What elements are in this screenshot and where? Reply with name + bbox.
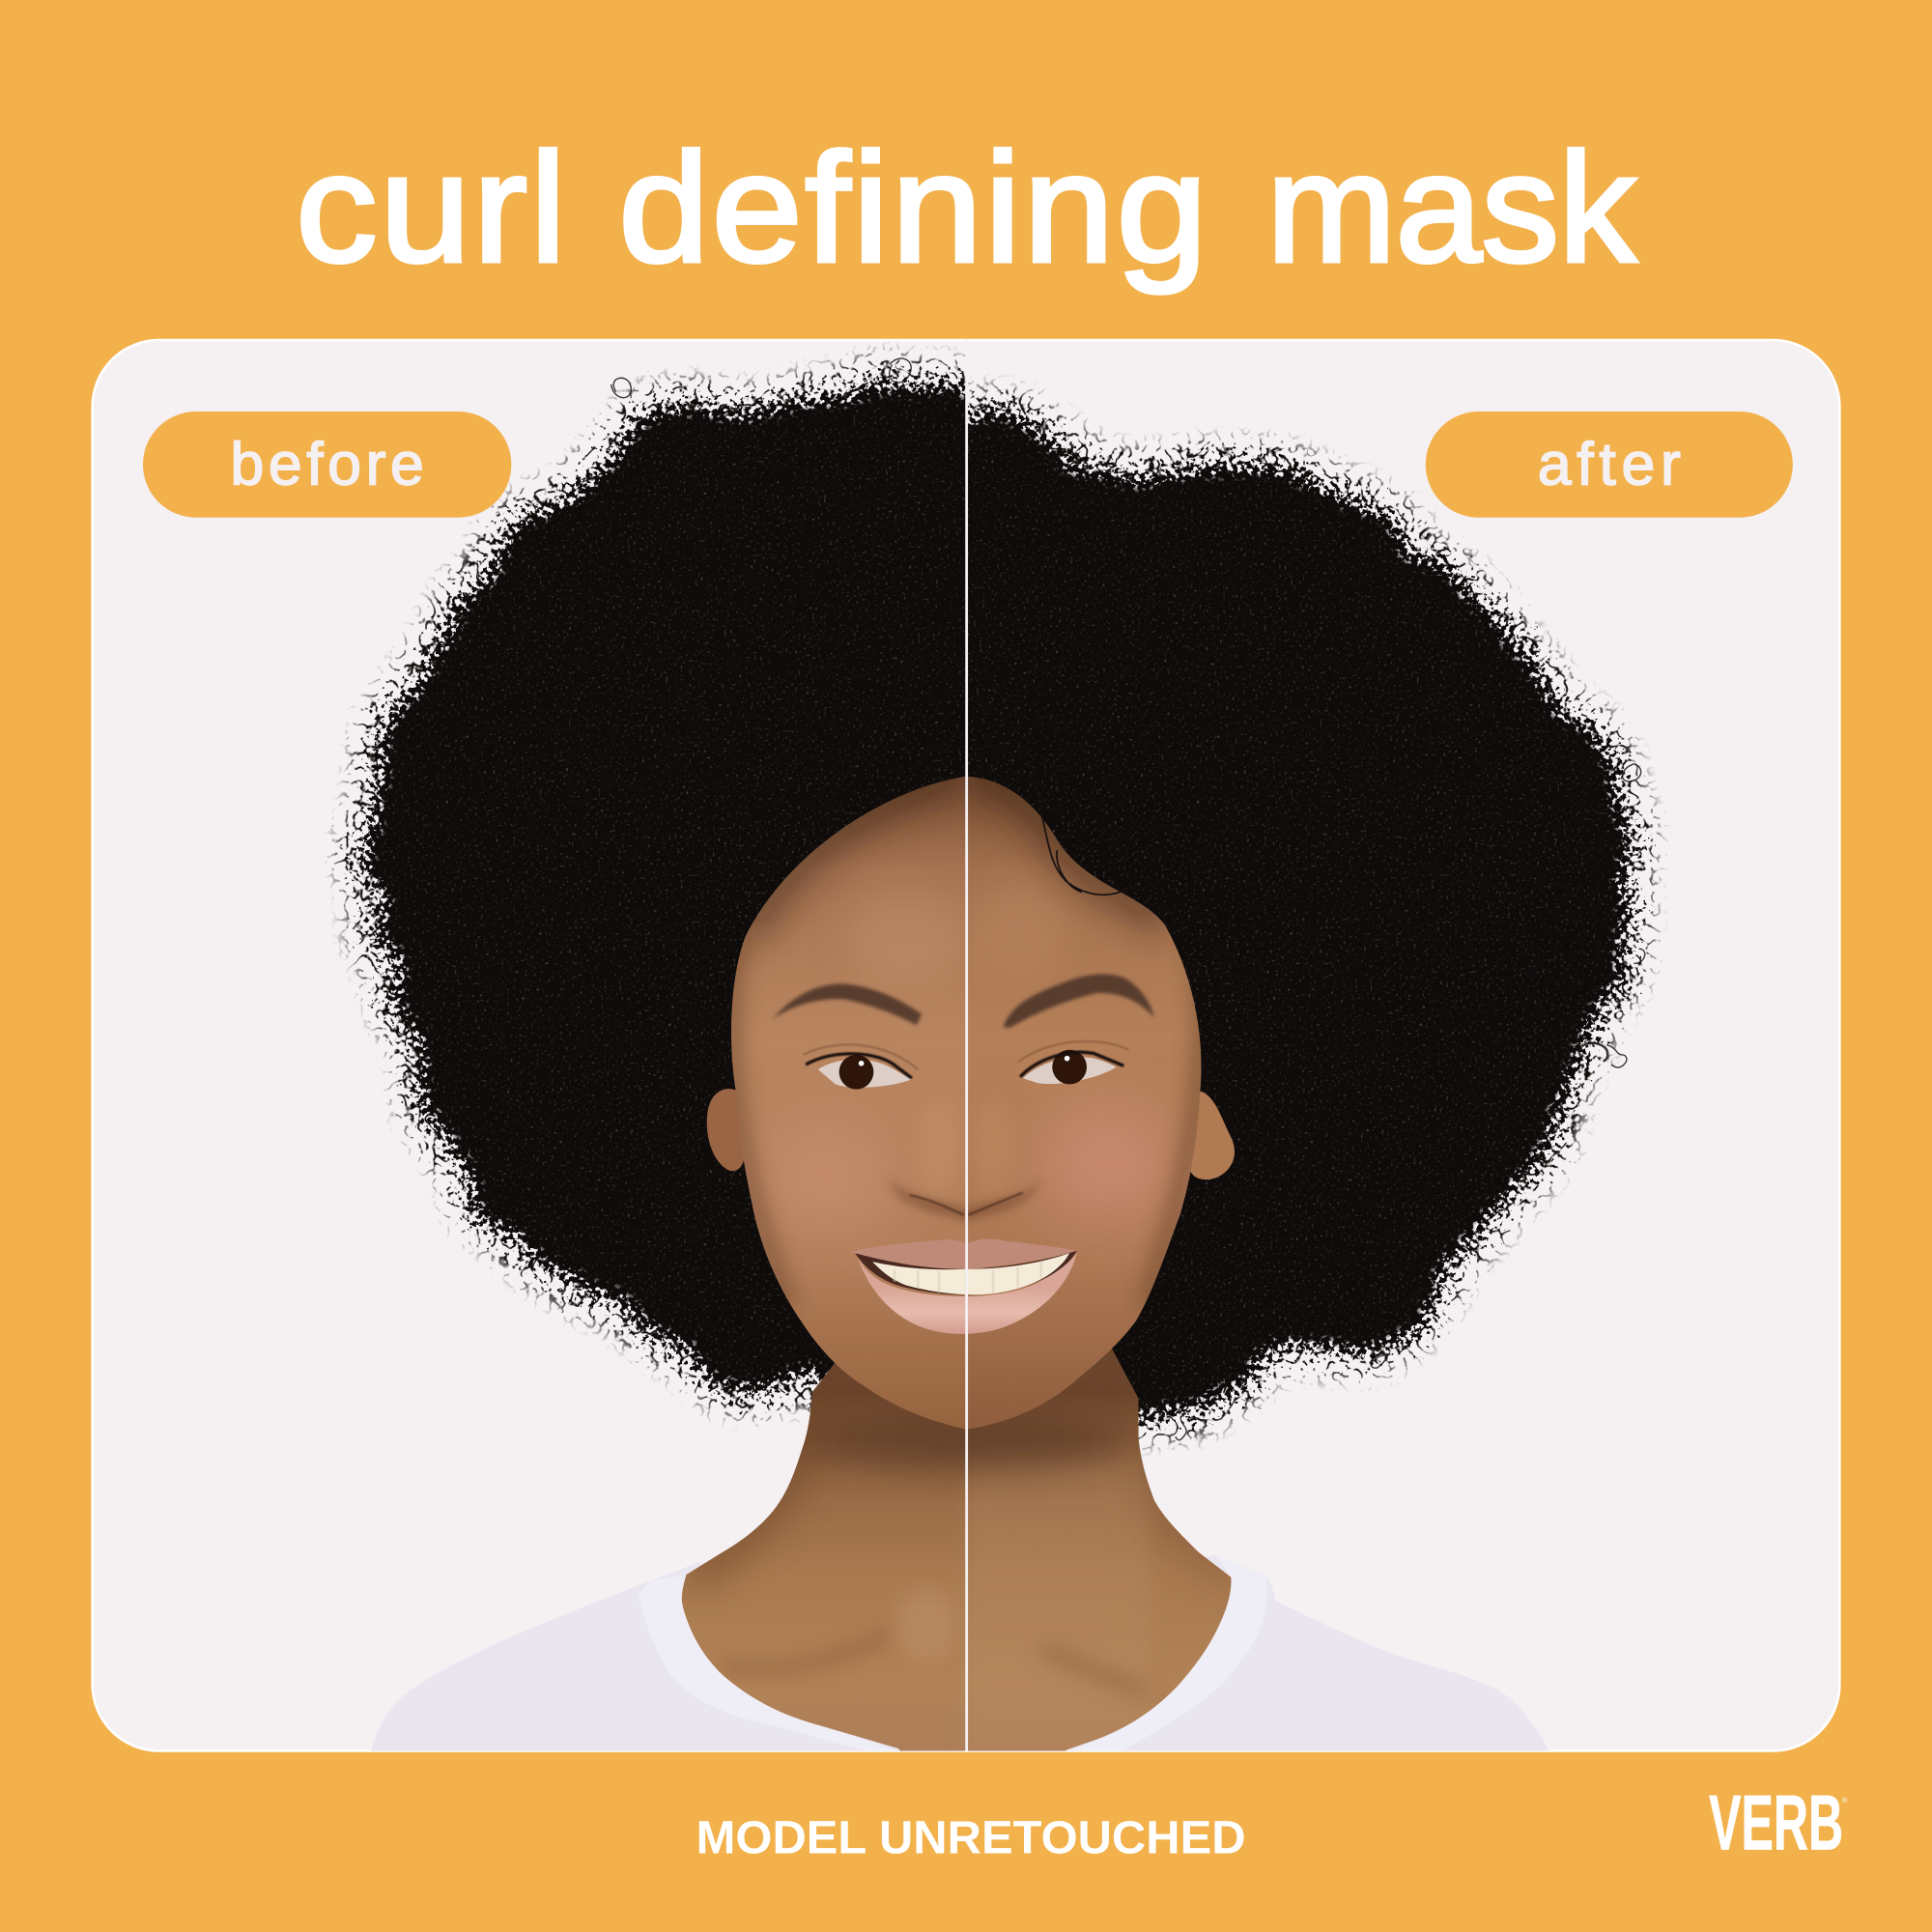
lash line: after: [1020, 1052, 1123, 1077]
collar: after: [1060, 1555, 1266, 1756]
hair frizz: before: [362, 374, 1010, 1441]
iris: after: [1052, 1050, 1087, 1084]
lid crease: after: [1018, 1041, 1128, 1062]
teeth: [872, 1253, 1069, 1294]
skin: before: [715, 764, 966, 1441]
collarbone: after: [1042, 1651, 1146, 1690]
collar: before: [639, 1575, 912, 1756]
eye: before: [804, 1044, 918, 1090]
hair: before side: [357, 369, 1010, 1441]
iris: before: [839, 1055, 873, 1090]
tooth gaps: [895, 1262, 1041, 1296]
title: curl: [296, 121, 566, 295]
skin: after: [966, 764, 1212, 1441]
footer caption: MODEL UNRETOUCHED: [696, 1811, 1246, 1863]
panel background: [93, 340, 1839, 1751]
hair frizz: after: [924, 410, 1635, 1441]
eyebrow: before: [773, 983, 922, 1025]
temple baby curls: [1041, 813, 1127, 895]
pill: after: [1426, 412, 1793, 518]
pill shape: after: [1426, 412, 1793, 518]
cheek blush: after: [1037, 1105, 1180, 1224]
pill label: after: after: [1538, 430, 1681, 497]
pill: before: [143, 412, 511, 518]
cheek blush: before: [757, 1122, 894, 1233]
lower lip: [858, 1253, 1077, 1334]
neck edge shadow: after: [1146, 1392, 1233, 1577]
nose shading: [890, 1177, 1040, 1220]
neck edge shadow: before: [690, 1392, 809, 1577]
pill shape: before: [143, 412, 511, 518]
neck: [666, 1337, 1257, 1762]
sternum highlight: [897, 1587, 956, 1661]
title: mask: [1266, 122, 1637, 295]
portrait: [357, 358, 1645, 1762]
nostril: after: [969, 1193, 1023, 1215]
hair mass: before: [357, 369, 1010, 1441]
divider line: [966, 340, 968, 1751]
mouth: [850, 1239, 1078, 1334]
ear: after: [1187, 1091, 1235, 1179]
t-shirt: after: [1066, 1555, 1549, 1750]
hair mass: after: [924, 403, 1641, 1441]
eyebrow: after: [1003, 975, 1154, 1028]
mouth shadow: [855, 1251, 1077, 1294]
brand logo: [1709, 1780, 1848, 1867]
hairline shadow: before: [746, 777, 966, 936]
forehead highlight: before: [844, 887, 967, 985]
hairline shadow: after: [966, 777, 1164, 924]
catchlight: after: [1065, 1056, 1069, 1061]
face: before: [715, 764, 967, 1441]
upper lip: [850, 1239, 1078, 1269]
face edge shadow: after: [1146, 936, 1203, 1306]
sclera: before: [818, 1060, 912, 1088]
nose highlight: before: [917, 1096, 961, 1195]
sclera: after: [1023, 1057, 1117, 1084]
face: after: [966, 764, 1212, 1441]
chin shadow: [800, 1412, 1132, 1471]
panel: before and after photo: [93, 340, 1839, 1762]
lash line: before: [806, 1054, 912, 1078]
lid crease: before: [804, 1044, 918, 1069]
face edge shadow: before: [732, 936, 788, 1306]
pill label: before: before: [231, 430, 424, 497]
neck base: [666, 1337, 1257, 1762]
nose: [890, 1177, 1040, 1220]
ear: before: [707, 1089, 746, 1171]
title: defining: [618, 121, 1208, 295]
eye: after: [1018, 1041, 1128, 1084]
neck lightening: after side: [966, 1454, 1151, 1756]
t-shirt: before: [371, 1563, 900, 1750]
forehead highlight: after: [967, 881, 1065, 980]
nose highlight: after: [974, 1096, 1012, 1195]
collarbone: before: [722, 1633, 891, 1669]
hair: after side: [924, 403, 1641, 1441]
nostril: before: [909, 1195, 963, 1215]
loose curls: [611, 358, 1645, 1440]
brand logo: VERB: [1709, 1780, 1843, 1867]
brand logo: ®: [1842, 1796, 1848, 1804]
catchlight: before: [859, 1061, 864, 1066]
title: [296, 121, 1637, 295]
